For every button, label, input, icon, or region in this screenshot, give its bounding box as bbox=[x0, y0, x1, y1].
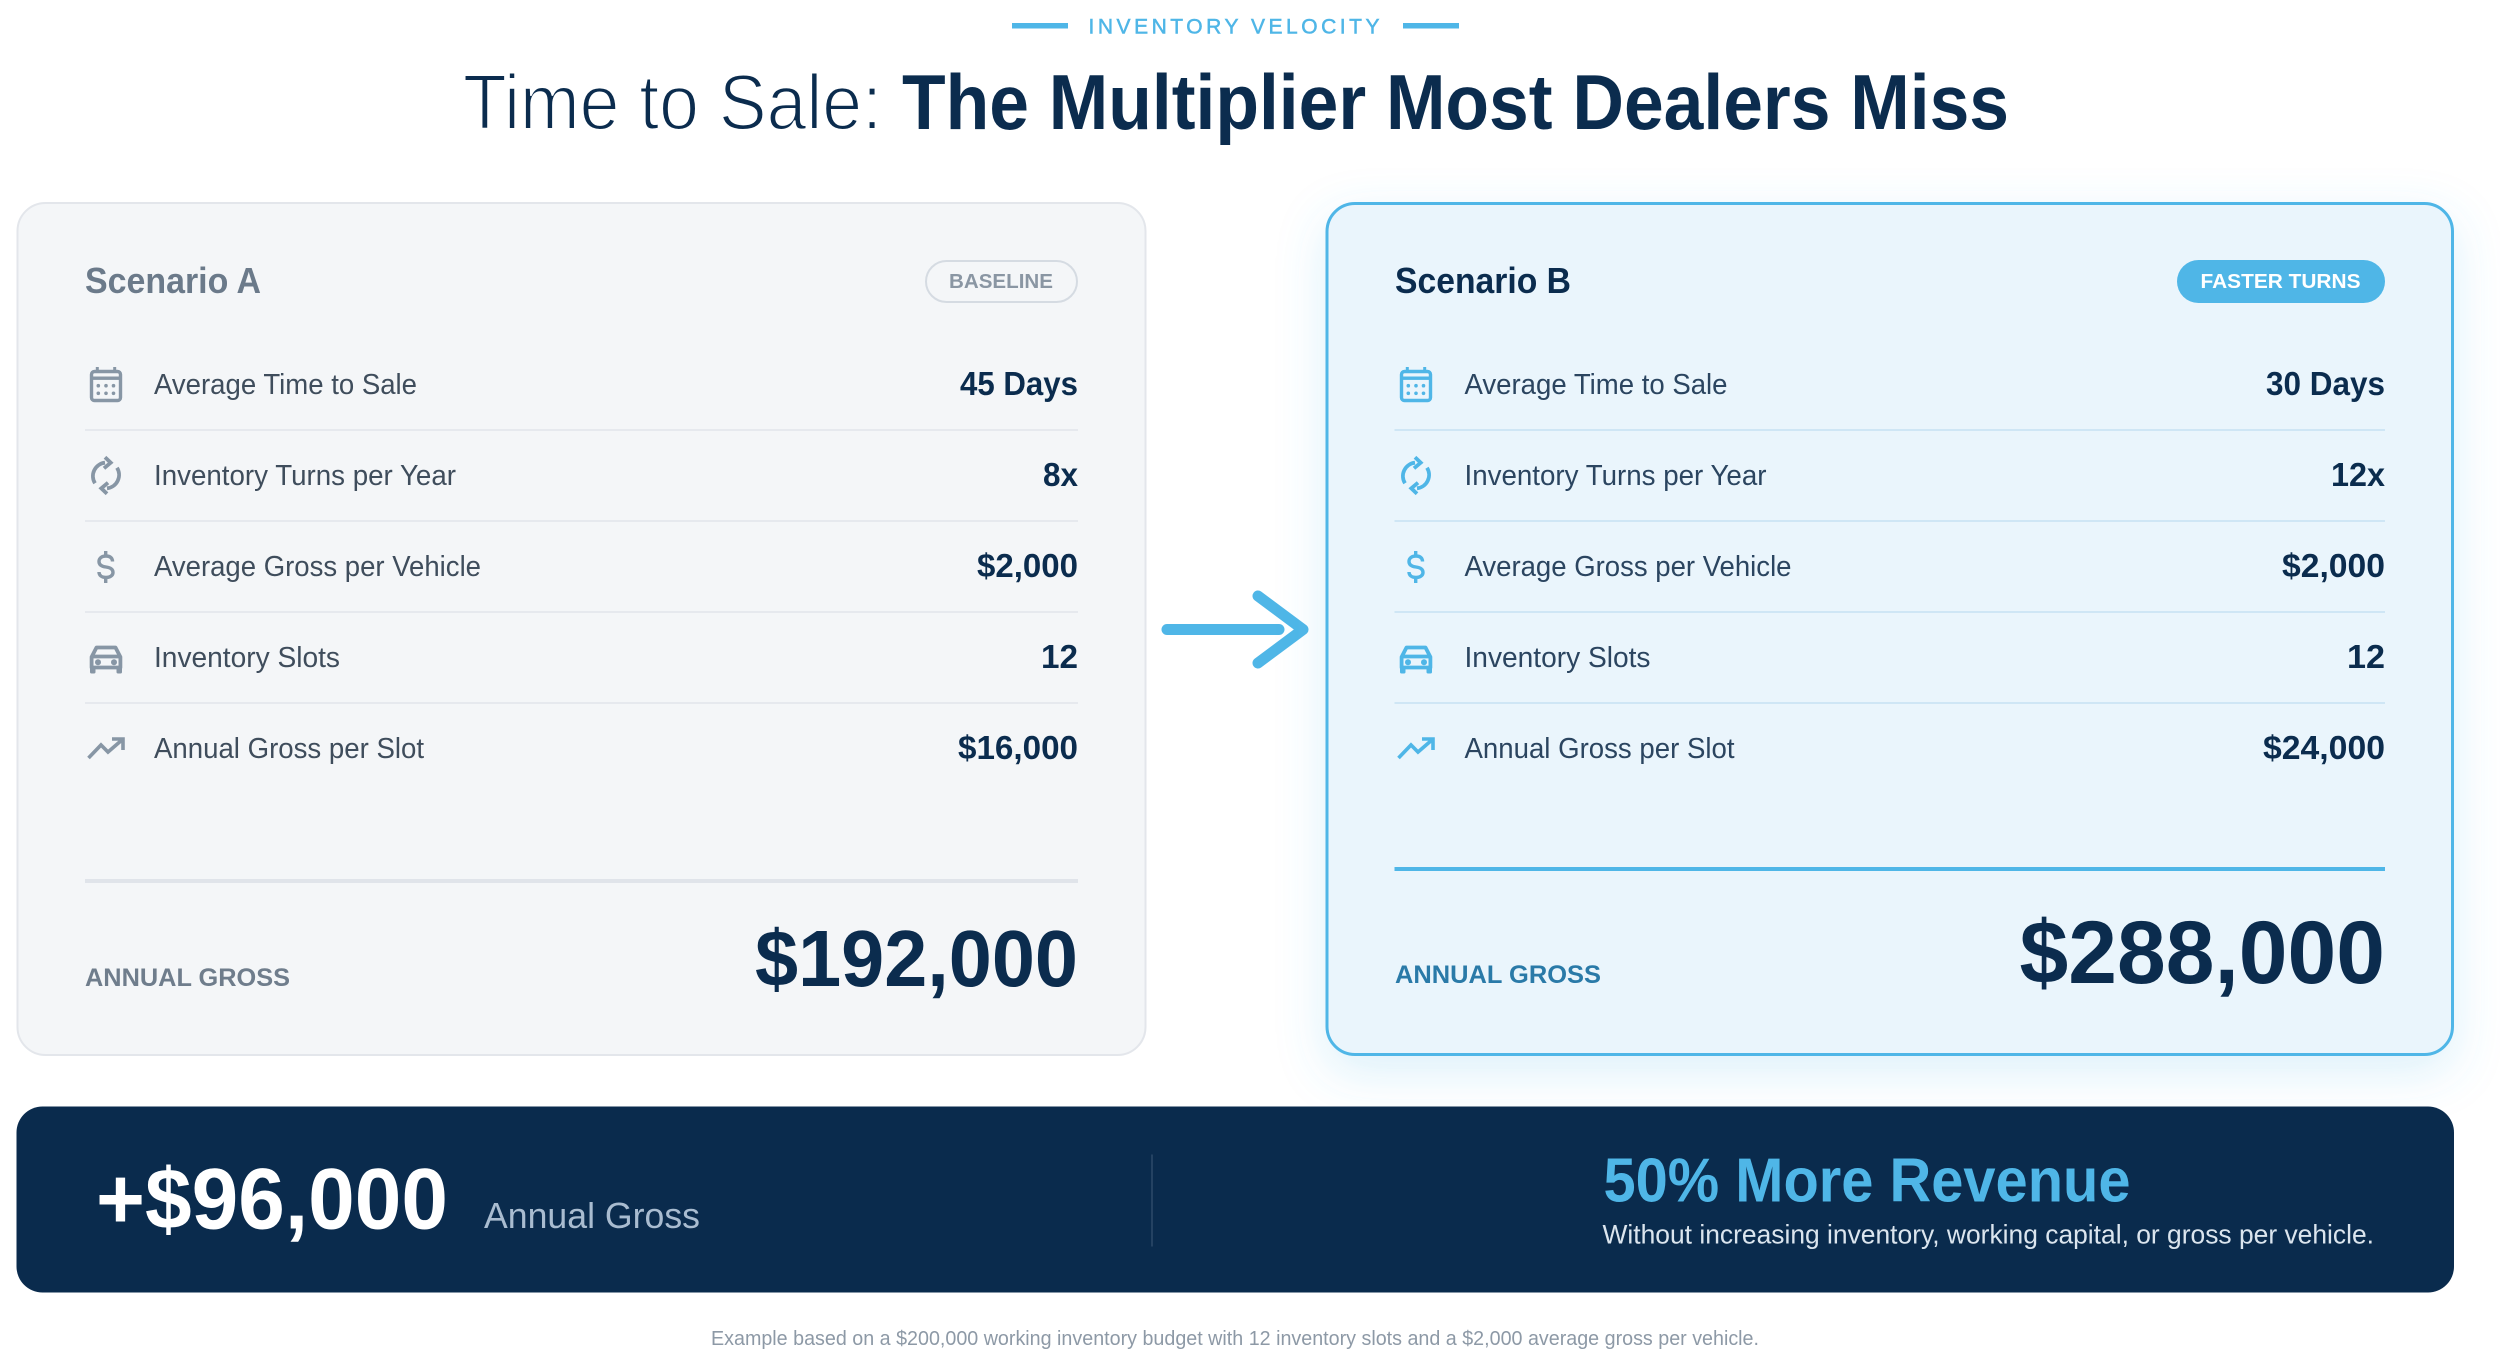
eyebrow: INVENTORY VELOCITY bbox=[1088, 15, 1380, 38]
scenario B heading: Scenario B bbox=[1395, 260, 1571, 301]
row: annual gross per slot bbox=[88, 729, 1078, 766]
icon: dollar bbox=[1409, 551, 1423, 583]
banner: revenue headline: 50% More Revenue bbox=[1604, 1146, 2130, 1216]
icon: calendar bbox=[92, 367, 120, 400]
total: scenario B: $288,000 bbox=[2020, 902, 2385, 1002]
panel: scenario B bbox=[1327, 204, 2452, 1054]
row: annual gross per slot bbox=[1398, 729, 2385, 766]
row: average time to sale bbox=[1402, 365, 2385, 402]
value: $2,000 bbox=[977, 547, 1078, 584]
value: $16,000 bbox=[958, 729, 1078, 766]
row: average gross per vehicle bbox=[99, 547, 1078, 584]
total: scenario B: ANNUAL GROSS bbox=[1395, 961, 1601, 989]
total: scenario A bbox=[85, 914, 1078, 1003]
icon: calendar bbox=[1402, 367, 1430, 400]
row: average gross per vehicle bbox=[1409, 547, 2385, 584]
label: Average Time to Sale bbox=[154, 369, 417, 401]
icon: dollar bbox=[99, 551, 113, 583]
footnote: Example based on a $200,000 working inventory budget with 12 inventory slots and a $2,000 average gross per vehicle. bbox=[711, 1328, 1759, 1350]
icon: refresh arrows bbox=[93, 457, 119, 494]
title: The Multiplier Most Dealers Miss bbox=[902, 58, 2009, 146]
scenario A heading: Scenario A bbox=[85, 260, 261, 301]
icon: car bbox=[90, 648, 122, 674]
label: Inventory Slots bbox=[1464, 642, 1650, 674]
title bbox=[463, 58, 2009, 146]
total: scenario A: $192,000 bbox=[755, 914, 1078, 1003]
value: 12 bbox=[1041, 638, 1078, 675]
arrow bbox=[1167, 596, 1303, 663]
value: 45 Days bbox=[960, 365, 1078, 402]
eyebrow bbox=[1012, 15, 1459, 38]
total: scenario A: ANNUAL GROSS bbox=[85, 964, 290, 992]
value: 30 Days bbox=[2266, 365, 2385, 402]
label: Annual Gross per Slot bbox=[1464, 733, 1734, 765]
label: Average Gross per Vehicle bbox=[154, 551, 481, 583]
row: inventory turns per year bbox=[93, 456, 1079, 494]
badge: baseline bbox=[926, 261, 1077, 302]
value: 12x bbox=[2331, 456, 2386, 493]
badge: baseline: BASELINE bbox=[949, 271, 1053, 293]
badge: faster turns: FASTER TURNS bbox=[2200, 271, 2360, 293]
label: Inventory Slots bbox=[154, 642, 340, 674]
row: inventory slots bbox=[1400, 638, 2385, 675]
badge: faster turns bbox=[2177, 260, 2385, 303]
banner: gain amount: +$96,000 bbox=[96, 1152, 448, 1248]
icon: trend up bbox=[1398, 739, 1433, 758]
total: scenario B bbox=[1395, 902, 2385, 1002]
banner: annual gross label: Annual Gross bbox=[484, 1195, 700, 1236]
row: inventory slots bbox=[90, 638, 1078, 675]
row: inventory turns per year bbox=[1403, 456, 2386, 494]
label: Average Gross per Vehicle bbox=[1464, 551, 1792, 583]
value: 12 bbox=[2347, 638, 2385, 675]
value: $2,000 bbox=[2282, 547, 2385, 584]
title: Time to Sale: bbox=[463, 58, 882, 146]
banner: revenue note: Without increasing inventory, working capital, or gross per vehicle. bbox=[1602, 1220, 2374, 1250]
value: 8x bbox=[1043, 456, 1079, 493]
panel: scenario A bbox=[18, 203, 1146, 1055]
icon: car bbox=[1400, 648, 1432, 674]
label: Average Time to Sale bbox=[1464, 369, 1728, 401]
label: Annual Gross per Slot bbox=[154, 733, 424, 765]
banner bbox=[16, 1106, 2454, 1292]
row: average time to sale bbox=[92, 365, 1078, 402]
icon: trend up bbox=[88, 739, 123, 758]
label: Inventory Turns per Year bbox=[1464, 460, 1767, 492]
label: Inventory Turns per Year bbox=[154, 460, 456, 492]
icon: refresh arrows bbox=[1403, 457, 1429, 494]
value: $24,000 bbox=[2263, 729, 2385, 766]
